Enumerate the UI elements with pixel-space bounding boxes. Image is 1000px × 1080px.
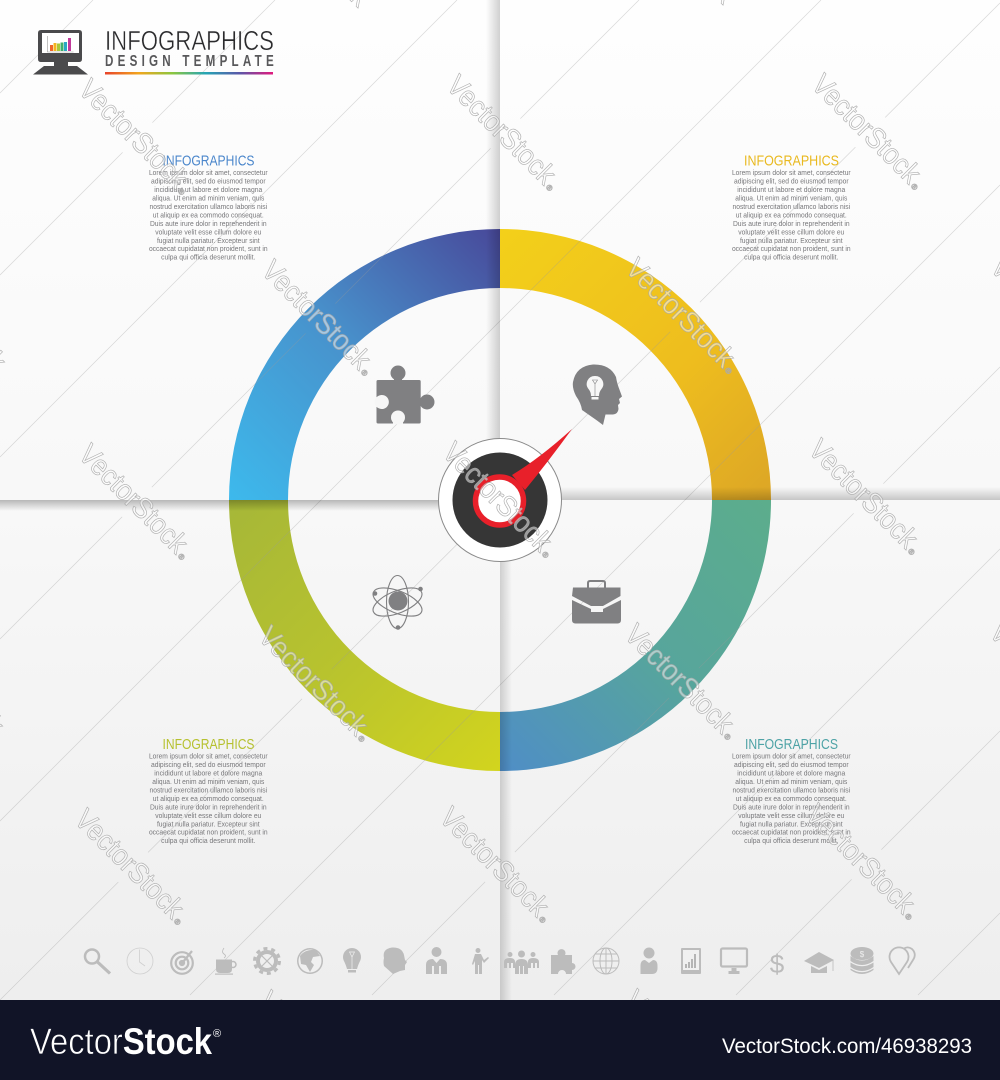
watermark row 2: ® [356, 734, 367, 744]
icon: small puzzle piece [551, 949, 576, 974]
icon: dollar sign: $ [770, 949, 785, 979]
text block: bottom right: INFOGRAPHICS [745, 737, 838, 753]
text block: bottom right: incididunt ut labore et dolore magna [737, 768, 846, 778]
red ring hub [476, 477, 524, 525]
text block: bottom left: Lorem ipsum dolor sit amet, consectetur [149, 752, 268, 760]
text block: top right: voluptate velit esse cillum dolore eu [738, 227, 844, 236]
watermark row 3: VectorStock [68, 803, 190, 925]
ring segment: bottom left green [229, 500, 500, 771]
text block: top left: ut aliquip ex ea commodo consequat. [153, 210, 264, 219]
watermark row 3: ® [537, 915, 548, 925]
icon: globe [297, 948, 323, 974]
text block: bottom left: incididunt ut labore et dolore magna [154, 768, 263, 778]
icon: tablet with chart [681, 948, 701, 974]
footer logo: VectorStock: VectorStock [30, 1021, 212, 1062]
text block: bottom right: occaecat cupidatat non proident, sunt in [732, 828, 851, 837]
text block: bottom right: Lorem ipsum dolor sit amet, consectetur [732, 752, 851, 760]
text block: top right: incididunt ut labore et dolore magna [737, 185, 846, 194]
text block: bottom left: nostrud exercitation ullamco laboris nisi [149, 785, 267, 794]
watermark row 2: VectorStock [802, 433, 924, 555]
icon: puzzle piece [374, 366, 434, 424]
watermark row 1: VectorStock [805, 68, 927, 190]
footer url: VectorStock.com/46938293 [722, 1035, 972, 1058]
center dial [438, 429, 572, 562]
text block: top left: adipiscing elit, sed do eiusmod tempor [151, 176, 266, 186]
ring segment: top right yellow [500, 229, 771, 500]
icon row [85, 947, 915, 979]
watermark row 2: VectorStock [72, 438, 194, 560]
red needle [512, 429, 572, 490]
text block: top right [732, 154, 851, 262]
text block: bottom left: fugiat nulla pariatur. Excepteur sint [157, 819, 260, 828]
watermark row 1: ® [723, 366, 734, 376]
text block: top left: Duis aute irure dolor in reprehenderit in [150, 219, 267, 228]
footer registered mark: ® [213, 1028, 221, 1040]
text block: bottom right: aliqua. Ut enim ad minim veniam, quis [735, 777, 847, 786]
text block: top left: voluptate velit esse cillum dolore eu [155, 227, 261, 236]
text block: top right: culpa qui officia deserunt mollit. [744, 253, 838, 262]
rainbow underline [105, 72, 273, 74]
watermark row 1: VectorStock [619, 252, 741, 374]
icon: clock [127, 948, 153, 974]
icon: businessman [426, 947, 447, 974]
text block: top left [149, 154, 268, 262]
text block: top right: nostrud exercitation ullamco laboris nisi [732, 202, 850, 211]
ring segment: bottom right teal [500, 500, 771, 771]
text block: top left: incididunt ut labore et dolore magna [154, 185, 263, 194]
dial dark disc [452, 452, 548, 548]
text block: bottom right: adipiscing elit, sed do eiusmod tempor [734, 760, 849, 769]
icon: atom [369, 576, 426, 630]
text block: top right: aliqua. Ut enim ad minim veniam, quis [735, 193, 847, 202]
text block: top left: occaecat cupidatat non proident, sunt in [149, 244, 268, 253]
text block: top left: Lorem ipsum dolor sit amet, consectetur [149, 168, 268, 177]
watermark row 1: ® [544, 183, 555, 193]
text block: bottom right: culpa qui officia deserunt mollit. [744, 836, 838, 845]
watermark row 3 [68, 798, 921, 927]
text block: top right: occaecat cupidatat non proident, sunt in [732, 244, 851, 253]
text block: bottom left [149, 737, 268, 845]
watermark row 1: ® [909, 182, 920, 192]
watermark row 2: ® [906, 547, 917, 557]
text block: top right: fugiat nulla pariatur. Excepteur sint [740, 236, 843, 245]
icon: gear [254, 948, 280, 974]
text block: bottom left: aliqua. Ut enim ad minim veniam, quis [152, 777, 264, 786]
icon: coffee cup [215, 948, 236, 975]
watermark row 3: ® [172, 917, 183, 927]
donut ring [229, 229, 771, 771]
icon: desktop monitor [721, 948, 747, 974]
icon: graduation cap [804, 952, 834, 973]
watermark row 1 [72, 68, 927, 378]
watermark row 1: VectorStock [440, 69, 562, 191]
icon: map pins [889, 947, 915, 974]
text block: bottom left: culpa qui officia deserunt mollit. [161, 836, 255, 845]
text block: bottom left: INFOGRAPHICS [162, 737, 254, 753]
icon: coin stack [850, 947, 874, 974]
icon: head with light bulb [573, 364, 622, 425]
watermark row 1: ® [359, 368, 370, 378]
text block: bottom right: fugiat nulla pariatur. Excepteur sint [740, 819, 843, 828]
text block: bottom right: nostrud exercitation ullamco laboris nisi [732, 785, 850, 794]
text block: bottom left: voluptate velit esse cillum dolore eu [155, 811, 261, 820]
text block: bottom left: Duis aute irure dolor in reprehenderit in [150, 802, 267, 811]
icon: light bulb [343, 948, 361, 972]
icon: head silhouette [384, 947, 407, 974]
watermark row 1: VectorStock [255, 254, 377, 376]
text block: bottom right: ut aliquip ex ea commodo consequat. [736, 794, 847, 803]
icon: wire globe [593, 948, 619, 974]
watermark row 3: VectorStock [799, 798, 921, 920]
watermark row 3: VectorStock [433, 801, 555, 923]
text block: bottom left: adipiscing elit, sed do eiusmod tempor [151, 760, 266, 769]
text block: bottom right [732, 737, 851, 845]
text block: top right: Duis aute irure dolor in reprehenderit in [733, 219, 850, 228]
watermark row 2: ® [176, 552, 187, 562]
text block: top right: Lorem ipsum dolor sit amet, consectetur [732, 168, 851, 177]
text block: bottom right: voluptate velit esse cillum dolore eu [738, 811, 844, 820]
subtitle: DESIGN TEMPLATE: DESIGN TEMPLATE [105, 52, 274, 69]
icon: computer monitor with bar chart [33, 30, 88, 74]
icon: target with dart [171, 951, 193, 974]
icon: coin stack: $ [860, 950, 865, 959]
icon: presenter figure [472, 948, 489, 974]
text block: bottom right: Duis aute irure dolor in reprehenderit in [733, 802, 850, 811]
text block: top right: ut aliquip ex ea commodo consequat. [736, 210, 847, 219]
icon: magnifier [85, 950, 110, 974]
header logo [33, 25, 274, 74]
text block: top right: INFOGRAPHICS [744, 154, 839, 170]
icon: team group [504, 950, 539, 974]
icon: user [640, 948, 658, 974]
dial white disc [438, 438, 562, 562]
text block: bottom left: occaecat cupidatat non proident, sunt in [149, 828, 268, 837]
icon: briefcase [572, 581, 621, 624]
watermark row 2: VectorStock [436, 436, 558, 558]
watermark row 1: VectorStock [72, 73, 194, 195]
watermark row 2: VectorStock [252, 620, 374, 742]
text block: top left: aliqua. Ut enim ad minim veniam, quis [152, 193, 264, 202]
text block: top left: nostrud exercitation ullamco laboris nisi [149, 202, 267, 211]
footer bar [0, 1000, 1000, 1080]
watermark row 2: ® [722, 732, 733, 742]
watermark row 3: ® [903, 912, 914, 922]
title: INFOGRAPHICS: INFOGRAPHICS [105, 25, 274, 56]
watermark row 2: VectorStock [618, 618, 740, 740]
watermark row 2: ® [540, 550, 551, 560]
text block: bottom left: ut aliquip ex ea commodo consequat. [153, 794, 264, 803]
text block: top right: adipiscing elit, sed do eiusmod tempor [734, 176, 849, 186]
text block: top left: fugiat nulla pariatur. Excepteur sint [157, 236, 260, 245]
ring segment: top left blue [229, 229, 500, 500]
watermark row 1: ® [176, 187, 187, 197]
watermark row 2 [72, 433, 924, 744]
text block: top left: INFOGRAPHICS [162, 154, 254, 170]
text block: top left: culpa qui officia deserunt mollit. [161, 253, 255, 262]
